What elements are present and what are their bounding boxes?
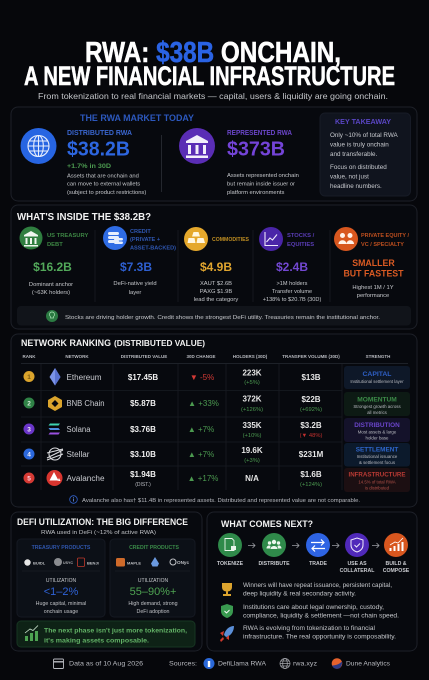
row: Stellar: (+3%) (244, 458, 260, 464)
step: distribute: DISTRIBUTE (258, 561, 290, 567)
row: BNB Chain: (+126%) (241, 407, 263, 413)
step: build and compose (383, 533, 410, 574)
insight: institutions: compliance, liquidity & settlement —not chain speed. (243, 612, 399, 620)
title (24, 37, 395, 91)
icon: globe (280, 658, 290, 668)
card: treasury products: UTILIZATION (46, 578, 76, 584)
insight: winners: Winners will have repeat issuance, persistent capital, (243, 582, 392, 589)
row: Ethereum: 1 (27, 374, 31, 381)
insight: rocket (220, 625, 396, 642)
note: Avalanche represented assets: Avalanche also has† $11.4B in represented assets. Distributed and represented value are not comparable. (82, 498, 360, 504)
category: US treasury debt (20, 226, 88, 296)
row: Stellar: Institutional issuance (357, 454, 398, 459)
arrow (248, 543, 255, 548)
row: BNB Chain: (+692%) (300, 407, 322, 413)
row: Stellar (24, 443, 410, 466)
row: Solana: Most assets & large (358, 430, 397, 434)
category: commodities: COMMODITIES (212, 237, 249, 243)
row: Ethereum: ▼ -5% (190, 373, 214, 382)
row: Ethereum: 223K (242, 368, 262, 378)
category: commodities (184, 227, 249, 303)
category: commodities: lead the category (194, 297, 238, 303)
card: credit products: 55–90%+ (130, 586, 176, 598)
table header: NETWORK (65, 354, 89, 359)
arrow (332, 543, 339, 548)
row: Stellar: 4 (27, 452, 31, 458)
callout: next phase: The next phase isn't just more tokenization, (44, 628, 187, 634)
row: Ethereum: $17.45B (128, 373, 158, 382)
category: US treasury debt: (~63K holders) (32, 290, 70, 296)
row: Stellar: & settlement focus (359, 460, 396, 465)
category: commodities: PAXG $1.9B (200, 289, 232, 295)
row: Avalanche: 5 (27, 476, 31, 482)
callout: next phase (17, 621, 195, 647)
arrow (292, 543, 299, 548)
row: Solana (24, 418, 410, 442)
subheading: RWA used in DeFi (~12% of active RWA) (41, 530, 156, 536)
step: build and compose: COMPOSE (383, 568, 410, 574)
stat: distributed RWA (67, 130, 146, 196)
icon: BNB Chain (48, 396, 62, 411)
row: Avalanche: $1.6B (300, 470, 322, 479)
category: credit: ASSET-BACKED) (130, 246, 176, 252)
icon: DefiLlama (204, 658, 214, 669)
footer: data date and sources (54, 658, 391, 669)
footer: data date and sources: Data as of 10 Aug 2026 (69, 660, 143, 668)
callout: key takeaway: headline numbers. (330, 183, 382, 190)
row: BNB Chain: all metrics (367, 410, 388, 415)
card: treasury products: BUIDL (33, 560, 46, 566)
stat: distributed RWA: DISTRIBUTED RWA (67, 130, 132, 137)
row: BNB Chain: 372K (242, 394, 262, 404)
category: private equity, VC, specialty: SMALLER (352, 258, 395, 268)
heading: network ranking: (DISTRIBUTED VALUE) (114, 339, 205, 348)
row: Stellar: $231M (299, 450, 324, 459)
stat: represented RWA (227, 130, 299, 196)
panel: network ranking (11, 334, 417, 507)
row: Ethereum: CAPITAL (363, 371, 391, 378)
card: treasury products: onchain usage (44, 609, 78, 615)
category: stocks and equities (259, 227, 321, 303)
icon: Stellar (47, 448, 63, 460)
category: private equity, VC, specialty: Highest 1M / 1Y (352, 285, 394, 291)
insight: institutions (221, 604, 399, 620)
step: distribute (258, 533, 290, 567)
category: commodities: XAUT $2.6B (200, 281, 232, 287)
row: BNB Chain (24, 392, 410, 416)
table header: HOLDERS (30D) (233, 354, 268, 359)
category: credit (103, 226, 176, 296)
category: private equity, VC, specialty: VC / SPECIALTY (361, 242, 404, 248)
row: Solana: 3 (27, 426, 31, 434)
callout: key takeaway: value is truly onchain (330, 142, 389, 148)
row: Stellar: 19.6K (241, 446, 263, 455)
row: Stellar: Stellar (66, 450, 90, 459)
heading: DeFi utilization: DEFI UTILIZATION: THE BIG DIFFERENCE (17, 517, 188, 527)
table header: DISTRIBUTED VALUE (121, 354, 167, 359)
step: build and compose: BUILD & (385, 561, 407, 567)
row: Ethereum: (+5%) (244, 380, 260, 386)
card: treasury products: <1–2% (44, 586, 78, 598)
card: treasury products (17, 539, 105, 617)
row: Ethereum: Ethereum (66, 373, 102, 382)
icon: Avalanche (46, 470, 62, 486)
step: use as collateral (340, 533, 375, 574)
callout: key takeaway: Focus on distributed (330, 164, 387, 171)
callout: key takeaway (320, 113, 410, 196)
icon: Solana (48, 424, 60, 434)
row: Solana: (+10%) (243, 433, 261, 439)
category: private equity, VC, specialty: performance (357, 293, 389, 299)
category: stocks and equities: $2.4B (276, 260, 308, 274)
footer: data date and sources: Sources: (169, 660, 197, 668)
insight: institutions: Institutions care about legal ownership, custody, (243, 604, 384, 611)
row: Solana: DISTRIBUTION (354, 422, 400, 429)
arrow (372, 543, 379, 548)
stat: distributed RWA: can move to external wallets (67, 182, 140, 188)
row: Avalanche: Avalanche (66, 474, 105, 483)
category: US treasury debt: Dominant anchor (29, 282, 73, 288)
stat: represented RWA: but remain inside issuer or (227, 182, 295, 188)
row: Avalanche: (+124%) (300, 482, 322, 488)
callout: key takeaway: and transferable. (330, 151, 378, 158)
category: private equity, VC, specialty: BUT FASTEST (343, 268, 404, 278)
insight: winners (222, 582, 392, 598)
row: Ethereum (24, 366, 410, 389)
icon: globe (20, 128, 56, 164)
row: Stellar: $3.10B (130, 450, 156, 459)
row: BNB Chain: $22B (301, 395, 321, 404)
category: US treasury debt: $16.2B (33, 260, 72, 274)
category: stocks and equities: EQUITIES (287, 242, 314, 248)
table header: RANK (22, 354, 36, 359)
callout: key takeaway: KEY TAKEAWAY (335, 117, 391, 126)
insight bar: Stocks are driving holder growth. Credit shows the strongest DeFi utility. Treasuries remain the institutional anchor. (65, 315, 380, 321)
heading: network ranking: NETWORK RANKING (21, 338, 111, 349)
stat: distributed RWA: $38.2B (67, 138, 130, 160)
category: credit: (PRIVATE + (130, 237, 161, 243)
heading: what comes next: WHAT COMES NEXT? (221, 519, 313, 530)
note: Avalanche represented assets (70, 496, 360, 504)
row: BNB Chain: MOMENTUM (357, 396, 397, 404)
heading: market today: THE RWA MARKET TODAY (80, 113, 194, 123)
icon: Dune (332, 658, 342, 669)
row: Avalanche (24, 468, 410, 492)
row: BNB Chain: $5.87B (130, 399, 156, 408)
row: Ethereum: $13B (301, 373, 321, 382)
row: BNB Chain: ▲ +33% (188, 399, 219, 408)
footer: data date and sources: DefiLlama RWA (218, 660, 267, 668)
step: trade (306, 533, 330, 567)
card: credit products: MAPLE (127, 560, 141, 566)
stat: represented RWA: $373B (227, 138, 285, 160)
card: credit products: ONyc (177, 560, 189, 565)
card: treasury products: USYC (63, 561, 73, 565)
stat: represented RWA: REPRESENTED RWA (227, 130, 292, 137)
insight: rocket: infrastructure. The real opportunity is composability. (243, 634, 396, 640)
category: credit: CREDIT (130, 229, 151, 235)
row: Solana: holder base (366, 436, 389, 440)
row: Stellar: SETTLEMENT (356, 446, 398, 454)
panel: what's inside (11, 205, 417, 329)
step: trade: TRADE (309, 561, 327, 567)
row: BNB Chain: Strongest growth across (353, 404, 401, 409)
card: credit products: DeFi adoption (137, 609, 170, 615)
table header: 30D CHANGE (186, 354, 216, 359)
insight: winners: deep liquidity & real secondary activity. (243, 590, 356, 598)
row: Avalanche: INFRASTRUCTURE (348, 472, 406, 478)
row: BNB Chain: BNB Chain (66, 399, 104, 408)
stat: represented RWA: Assets represented onchain (227, 173, 299, 179)
category: private equity, VC, specialty: PRIVATE EQUITY / (361, 233, 409, 239)
category: credit: layer (129, 290, 141, 296)
step: use as collateral: USE AS (347, 561, 367, 567)
heading: what's inside: WHAT'S INSIDE THE $38.2B? (17, 212, 151, 223)
card: treasury products: BENJI (87, 560, 99, 566)
table header (22, 354, 390, 359)
row: Solana: (▼ 48%) (300, 433, 322, 439)
card: credit products: UTILIZATION (138, 578, 168, 584)
stat: distributed RWA: Assets that are onchain and (67, 174, 139, 180)
card: credit products: High demand, strong (128, 601, 178, 607)
table header: STRENGTH (366, 354, 390, 359)
row: Stellar: ▲ +7% (188, 450, 214, 459)
card: treasury products: Huge capital, minimal (36, 601, 86, 607)
title: RWA: $38B ONCHAIN, (85, 37, 341, 69)
category: US treasury debt: DEBT (47, 242, 63, 248)
row: Avalanche: ▲ +17% (188, 474, 218, 483)
row: Solana: $3.76B (130, 425, 156, 434)
callout: key takeaway: Only ~10% of total RWA (330, 132, 399, 139)
subtitle: From tokenization to real financial markets — capital, users & liquidity are going onchain. (38, 92, 388, 101)
card: credit products (110, 539, 195, 617)
row: Ethereum: Institutional settlement layer (350, 379, 404, 384)
card: treasury products: TREASURY PRODUCTS (32, 545, 91, 551)
insight bar (17, 306, 411, 326)
step: use as collateral: COLLATERAL (340, 568, 375, 574)
row: Solana: Solana (66, 425, 91, 434)
insight: rocket: RWA is evolving from tokenization to financial (243, 625, 375, 632)
stat: distributed RWA: +1.7% in 30D (67, 163, 111, 170)
category: commodities: $4.9B (200, 260, 232, 274)
row: Avalanche: N/A (245, 474, 259, 483)
category: credit: $7.3B (120, 260, 152, 274)
icon: bank (179, 128, 215, 164)
row: Solana: 335K (242, 421, 262, 430)
category: US treasury debt: US TREASURY (47, 233, 88, 239)
category: credit: DeFi-native yield (113, 281, 157, 287)
icon: Ethereum (50, 368, 60, 386)
category: stocks and equities: Transfer volume (272, 289, 312, 295)
row: BNB Chain: 2 (27, 400, 31, 408)
icon: calendar (54, 659, 64, 668)
row: Avalanche: 14.5% of total RWA (358, 480, 396, 484)
table header: TRANSFER VOLUME (30D) (282, 354, 340, 359)
footer: data date and sources: rwa.xyz (293, 660, 317, 668)
callout: key takeaway: value, not just (330, 174, 369, 180)
category: private equity, VC, specialty (334, 227, 409, 299)
callout: next phase: it's making assets composable. (44, 638, 149, 644)
row: Solana: $3.2B (300, 421, 322, 430)
row: Avalanche: (DIST.) (135, 482, 151, 488)
panel: DeFi utilization (11, 512, 202, 651)
stat: distributed RWA: (subject to product restrictions) (67, 190, 146, 196)
footer: data date and sources: Dune Analytics (346, 660, 391, 668)
step: tokenize (217, 533, 244, 567)
card: credit products: CREDIT PRODUCTS (129, 545, 179, 551)
row: Solana: ▲ +7% (188, 425, 214, 434)
step: tokenize: TOKENIZE (217, 561, 244, 567)
panel: what comes next (207, 512, 417, 651)
category: stocks and equities: +138% to $20.7B (30D) (263, 297, 321, 303)
category: stocks and equities: STOCKS / (287, 233, 315, 239)
row: Avalanche: is distributed (365, 486, 390, 490)
row: Avalanche: $1.94B (130, 470, 156, 479)
stat: represented RWA: platform environments (227, 190, 284, 196)
category: stocks and equities: >1M holders (277, 281, 308, 287)
panel: the RWA market today (11, 107, 417, 201)
